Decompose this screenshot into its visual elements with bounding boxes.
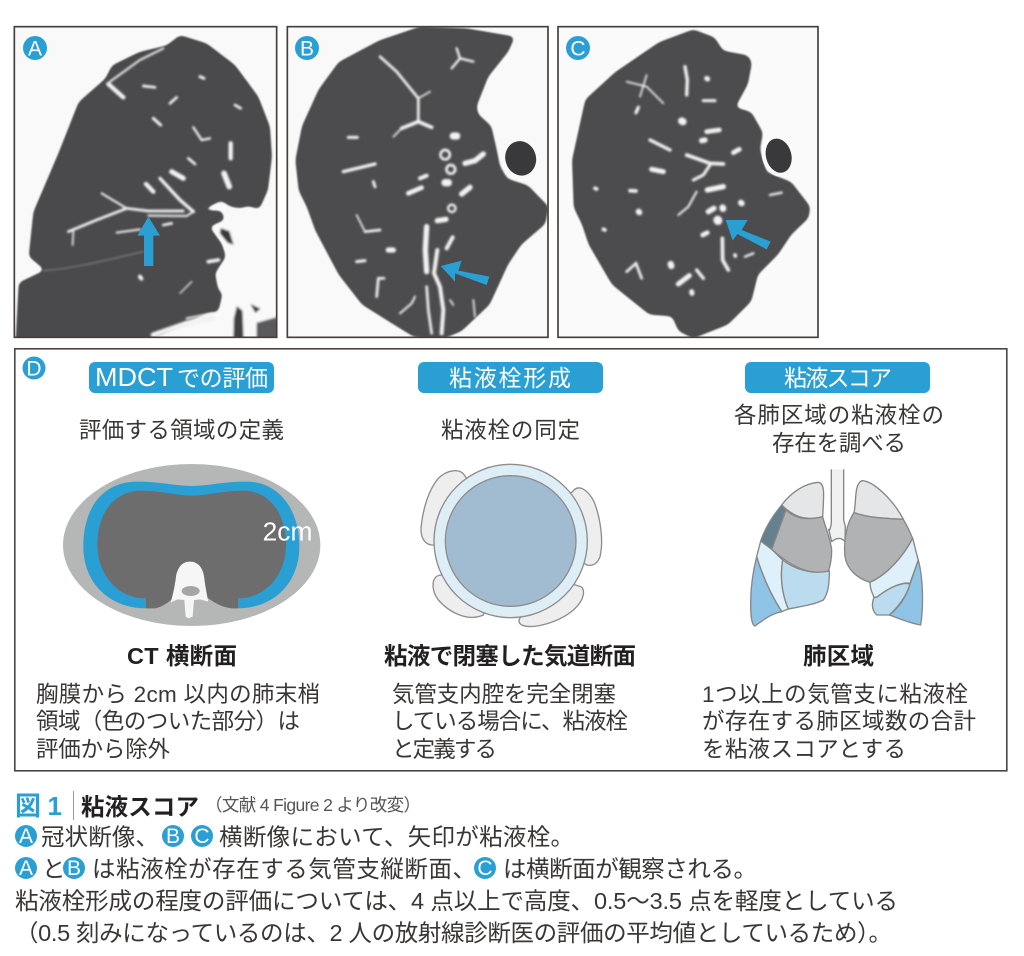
arrow B: [441, 261, 489, 285]
panel D badge: [22, 356, 46, 380]
subheading: occluded airway section: 粘液で閉塞した気道断面: [384, 643, 636, 669]
caption line 1: C: [194, 825, 210, 848]
frame B: [287, 27, 548, 337]
lung A silhouette: [15, 35, 272, 353]
panel A badge: [23, 36, 47, 60]
subheading: plug identification: 粘液栓の同定: [441, 418, 580, 443]
right lung upper: [782, 482, 824, 518]
description 2: [392, 682, 628, 762]
vessels C: [595, 67, 782, 293]
heading pill: MDCT evaluation: [89, 362, 274, 393]
trachea: [829, 469, 845, 542]
description 3: が存在する肺区域数の合計: [702, 709, 976, 734]
heading pill: MDCT evaluation: MDCT: [95, 364, 173, 392]
arrow A: [137, 217, 160, 266]
frame C: [558, 27, 818, 337]
peripheral 2cm band: [83, 482, 299, 608]
heading pill: mucus score: 粘液スコア: [784, 365, 892, 391]
description 2: している場合に、粘液栓: [392, 709, 628, 734]
description 3: を粘液スコアとする: [702, 737, 906, 762]
subheading: region definition: 評価する領域の定義: [79, 418, 284, 443]
panel A badge: A: [28, 38, 42, 60]
occluded lumen: [445, 476, 576, 606]
heading pill: mucus plug formation: 粘液栓形成: [449, 365, 571, 391]
panel B badge: [295, 36, 319, 60]
caption line 4: （0.5 刻みになっているのは、2 人の放射線診断医の評価の平均値としているため）。: [15, 920, 892, 946]
caption title: 図 1: [15, 791, 62, 821]
description 1: 領域（色のついた部分）は: [36, 709, 300, 734]
right lung lower: [757, 541, 788, 612]
description 3: [702, 682, 976, 762]
caption title: （文献 4 Figure 2 より改変）: [205, 795, 421, 815]
panel C: axial CT image: [558, 27, 818, 338]
arrow C: [726, 220, 771, 249]
caption title: [15, 791, 421, 821]
caption title: 粘液スコア: [81, 794, 199, 820]
description 2: 気管支内腔を完全閉塞: [392, 682, 616, 707]
caption line 1: A: [19, 825, 33, 848]
column 1: MDCT evaluation: [36, 362, 320, 762]
caption line 2: は横断面が観察される。: [503, 856, 757, 882]
panel B badge: B: [300, 38, 314, 60]
heading pill: mucus plug formation: [418, 362, 603, 393]
caption: [15, 791, 898, 946]
subheading: CT axial section: CT 横断面: [127, 643, 237, 669]
heading pill: mucus score: [745, 362, 930, 393]
vessels B: [343, 48, 483, 333]
description 1: [36, 682, 320, 762]
heading pill: MDCT evaluation: での評価: [177, 365, 268, 391]
caption line 1: 横断像において、矢印が粘液栓。: [219, 824, 574, 850]
caption line 2: と: [42, 856, 66, 882]
panel D badge: D: [26, 358, 42, 380]
frame D: [15, 349, 1007, 771]
caption line 2: [15, 856, 757, 882]
caption line 1: B: [166, 825, 180, 848]
left lung upper: [854, 481, 903, 519]
trachea B: [505, 141, 536, 176]
panel C badge: [566, 36, 590, 60]
subheading: survey of segments: 存在を調べる: [772, 431, 906, 456]
caption line 1: 冠状断像、: [41, 824, 159, 850]
panel C badge: C: [570, 38, 586, 60]
caption line 2: C: [477, 857, 493, 880]
description 3: 1つ以上の気管支に粘液栓: [702, 682, 968, 707]
panel A: coronal CT image: [14, 27, 283, 353]
cartilage plates: [421, 471, 500, 545]
caption line 1: [15, 824, 574, 850]
label 2cm: 2cm: [263, 517, 312, 547]
description 1: 胸膜から 2cm 以内の肺末梢: [36, 682, 320, 707]
trachea C: [762, 138, 792, 177]
left lung lower: [870, 538, 918, 597]
airways and mediastinum A: [216, 227, 276, 336]
panel B: axial CT image: [287, 27, 549, 340]
spine: [171, 562, 208, 618]
caption line 2: B: [67, 857, 81, 880]
lung C silhouette: [572, 29, 810, 338]
panel D: mucus score diagram: [15, 349, 1007, 771]
caption line 2: は粘液栓が存在する気管支縦断面、: [92, 856, 476, 882]
subheading: lung segments: 肺区域: [803, 643, 874, 669]
airway cross-section diagram: [421, 464, 602, 626]
subheading: survey of segments: 各肺区域の粘液栓の: [734, 403, 944, 428]
lung B silhouette: [295, 27, 549, 340]
vessels A: [43, 48, 241, 335]
central lung region: [97, 491, 286, 608]
airway wall: [434, 464, 587, 618]
lung segments diagram: [751, 469, 923, 626]
description 2: と定義する: [392, 737, 497, 762]
frame A: [14, 27, 277, 337]
caption line 2: A: [19, 857, 33, 880]
subheading: survey of segments: [734, 403, 944, 456]
CT cross-section diagram: [63, 464, 320, 626]
description 1: 評価から除外: [36, 737, 170, 762]
column 3: mucus score: [702, 362, 976, 762]
caption line 3: 粘液栓形成の程度の評価については、4 点以上で高度、0.5〜3.5 点を軽度としている: [15, 888, 898, 914]
column 2: mucus plug formation: [384, 362, 636, 762]
